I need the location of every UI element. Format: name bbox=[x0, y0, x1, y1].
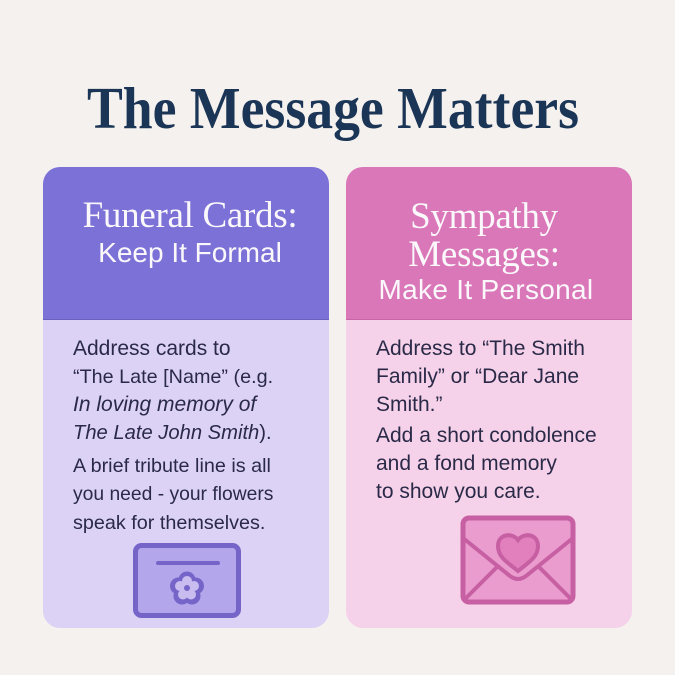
title: The Message Matters bbox=[87, 75, 579, 141]
text block: condolence: Add a short condolence bbox=[376, 424, 597, 447]
subheading: keep it formal: Keep It Formal bbox=[98, 237, 282, 268]
text block: condolence: and a fond memory bbox=[376, 452, 557, 475]
text block: addressing bbox=[73, 337, 273, 444]
panel header: sympathy messages bbox=[346, 167, 632, 320]
text block: addressing: “The Late [Name” (e.g. bbox=[73, 366, 273, 388]
text block: addressing: In loving memory of bbox=[73, 393, 256, 416]
heading: sympathy messages: Sympathy bbox=[410, 196, 558, 237]
text block: condolence: to show you care. bbox=[376, 480, 541, 503]
text block: tribute: you need - your flowers bbox=[73, 484, 273, 505]
text block: addressing: Address to “The Smith bbox=[376, 337, 585, 360]
text block: addressing bbox=[376, 337, 585, 416]
text block: addressing: The Late John Smith). bbox=[73, 422, 272, 444]
panel: funeral cards bbox=[43, 167, 329, 628]
text block: condolence bbox=[376, 424, 597, 503]
text block: addressing: Address cards to bbox=[73, 337, 231, 360]
text block: addressing: Smith.” bbox=[376, 393, 443, 416]
heading: sympathy messages bbox=[408, 196, 560, 275]
heading: funeral cards: Funeral Cards: bbox=[83, 195, 297, 236]
panel: sympathy messages bbox=[346, 167, 632, 628]
panel header: funeral cards bbox=[43, 167, 329, 320]
icon: envelope with heart bbox=[460, 516, 576, 604]
subheading: make it personal: Make It Personal bbox=[379, 274, 593, 305]
text block: addressing: Family” or “Dear Jane bbox=[376, 365, 579, 388]
text block: tribute: speak for themselves. bbox=[73, 512, 265, 534]
heading: sympathy messages: Messages: bbox=[408, 234, 560, 275]
text block: tribute: A brief tribute line is all bbox=[73, 455, 271, 477]
icon: card with flower bbox=[133, 543, 241, 618]
text block: tribute bbox=[73, 455, 273, 534]
